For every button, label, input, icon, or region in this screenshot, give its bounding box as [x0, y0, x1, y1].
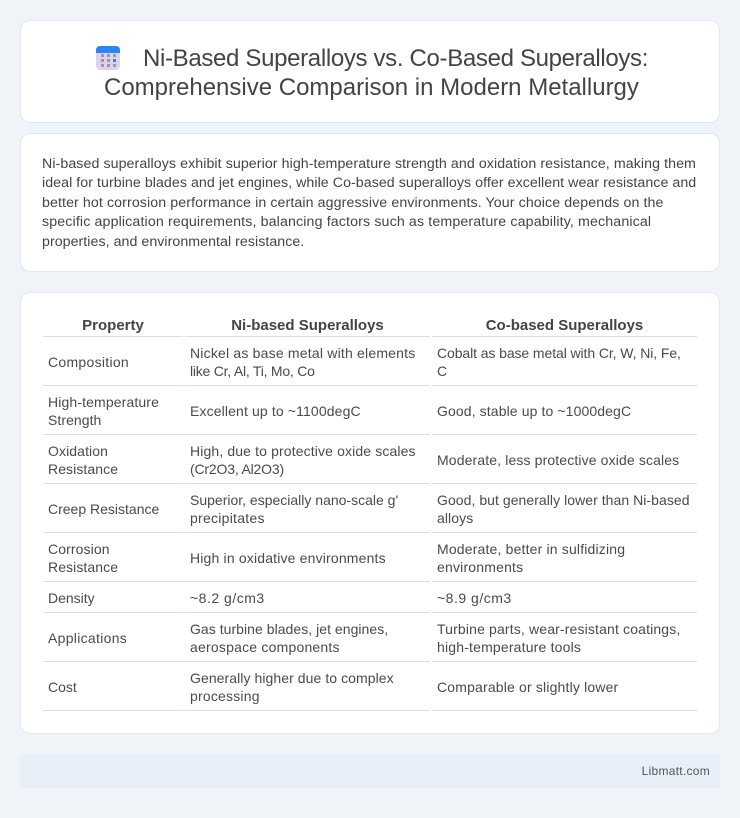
row: oxidation resistance: Moderate, less protective oxide scales: [437, 452, 679, 468]
row: cost: Comparable or slightly lower: [437, 679, 618, 695]
row: composition: C: [437, 363, 447, 379]
row: applications: [48, 621, 680, 655]
row: corrosion resistance: Resistance: [48, 559, 118, 575]
row: density: Density: [48, 590, 95, 606]
row: composition: Composition: [48, 354, 129, 370]
row: oxidation resistance: Oxidation: [48, 443, 108, 459]
row: density: ~8.2 g/cm3: [190, 590, 265, 606]
row: corrosion resistance: [48, 541, 625, 575]
row: oxidation resistance: High, due to protective oxide scales: [190, 443, 416, 459]
intro text: ideal for turbine blades and jet engines, while Co-based superalloys offer excellent wear resistance and: [42, 175, 696, 191]
table header: Property: [82, 317, 144, 334]
title: Ni-Based Superalloys vs. Co-Based Superalloys:: [143, 45, 648, 72]
row: corrosion resistance: environments: [437, 559, 523, 575]
row: oxidation resistance: (Cr2O3, Al2O3): [190, 461, 284, 477]
row: corrosion resistance: Moderate, better in sulfidizing: [437, 541, 625, 557]
row: creep resistance: [48, 492, 690, 526]
table header: Ni-based Superalloys: [231, 317, 384, 334]
intro text: [42, 156, 696, 250]
row: corrosion resistance: Corrosion: [48, 541, 110, 557]
row: applications: aerospace components: [190, 639, 340, 655]
row: creep resistance: precipitates: [190, 510, 265, 526]
row: composition: Nickel as base metal with elements: [190, 345, 415, 361]
row: high-temperature strength: High-temperature: [48, 394, 159, 410]
intro text: specific application requirements, balancing factors such as temperature capability, mechanical: [42, 214, 651, 230]
row: composition: like Cr, Al, Ti, Mo, Co: [190, 363, 315, 379]
row: creep resistance: Creep Resistance: [48, 501, 159, 517]
row: high-temperature strength: Excellent up to ~1100degC: [190, 403, 361, 419]
intro text: properties, and environmental resistance.: [42, 234, 304, 250]
title: Comprehensive Comparison in Modern Metallurgy: [104, 74, 639, 101]
intro text: better hot corrosion performance in certain aggressive environments. Your choice depends on the: [42, 195, 664, 211]
row: creep resistance: Superior, especially nano-scale g': [190, 492, 398, 508]
row: corrosion resistance: High in oxidative environments: [190, 550, 386, 566]
table header: [82, 317, 643, 334]
row: oxidation resistance: Resistance: [48, 461, 118, 477]
row: creep resistance: Good, but generally lower than Ni-based: [437, 492, 690, 508]
row: applications: high-temperature tools: [437, 639, 581, 655]
row: cost: Cost: [48, 679, 77, 695]
row: high-temperature strength: [48, 394, 631, 428]
row: density: [48, 590, 512, 606]
row: creep resistance: alloys: [437, 510, 473, 526]
table panel: [20, 292, 720, 734]
comparison table: [43, 317, 697, 711]
row: composition: Cobalt as base metal with Cr, W, Ni, Fe,: [437, 345, 681, 361]
row: high-temperature strength: Good, stable up to ~1000degC: [437, 403, 631, 419]
row: cost: processing: [190, 688, 260, 704]
table header: Co-based Superalloys: [486, 317, 643, 334]
row: applications: Gas turbine blades, jet engines,: [190, 621, 388, 637]
header panel: [20, 20, 720, 123]
row: high-temperature strength: Strength: [48, 412, 101, 428]
row: composition: [48, 345, 681, 379]
row: density: ~8.9 g/cm3: [437, 590, 512, 606]
icon: calendar: [96, 46, 120, 70]
row: cost: [48, 670, 618, 704]
row: cost: Generally higher due to complex: [190, 670, 394, 686]
row: applications: Turbine parts, wear-resistant coatings,: [437, 621, 680, 637]
footer text: Libmatt.com: Libmatt.com: [642, 764, 710, 778]
footer bar: [20, 754, 720, 788]
intro text: Ni-based superalloys exhibit superior high-temperature strength and oxidation resistance, making them: [42, 156, 696, 172]
intro panel: [20, 133, 720, 272]
title: [104, 45, 648, 101]
row: applications: Applications: [48, 630, 127, 646]
row: oxidation resistance: [48, 443, 679, 477]
